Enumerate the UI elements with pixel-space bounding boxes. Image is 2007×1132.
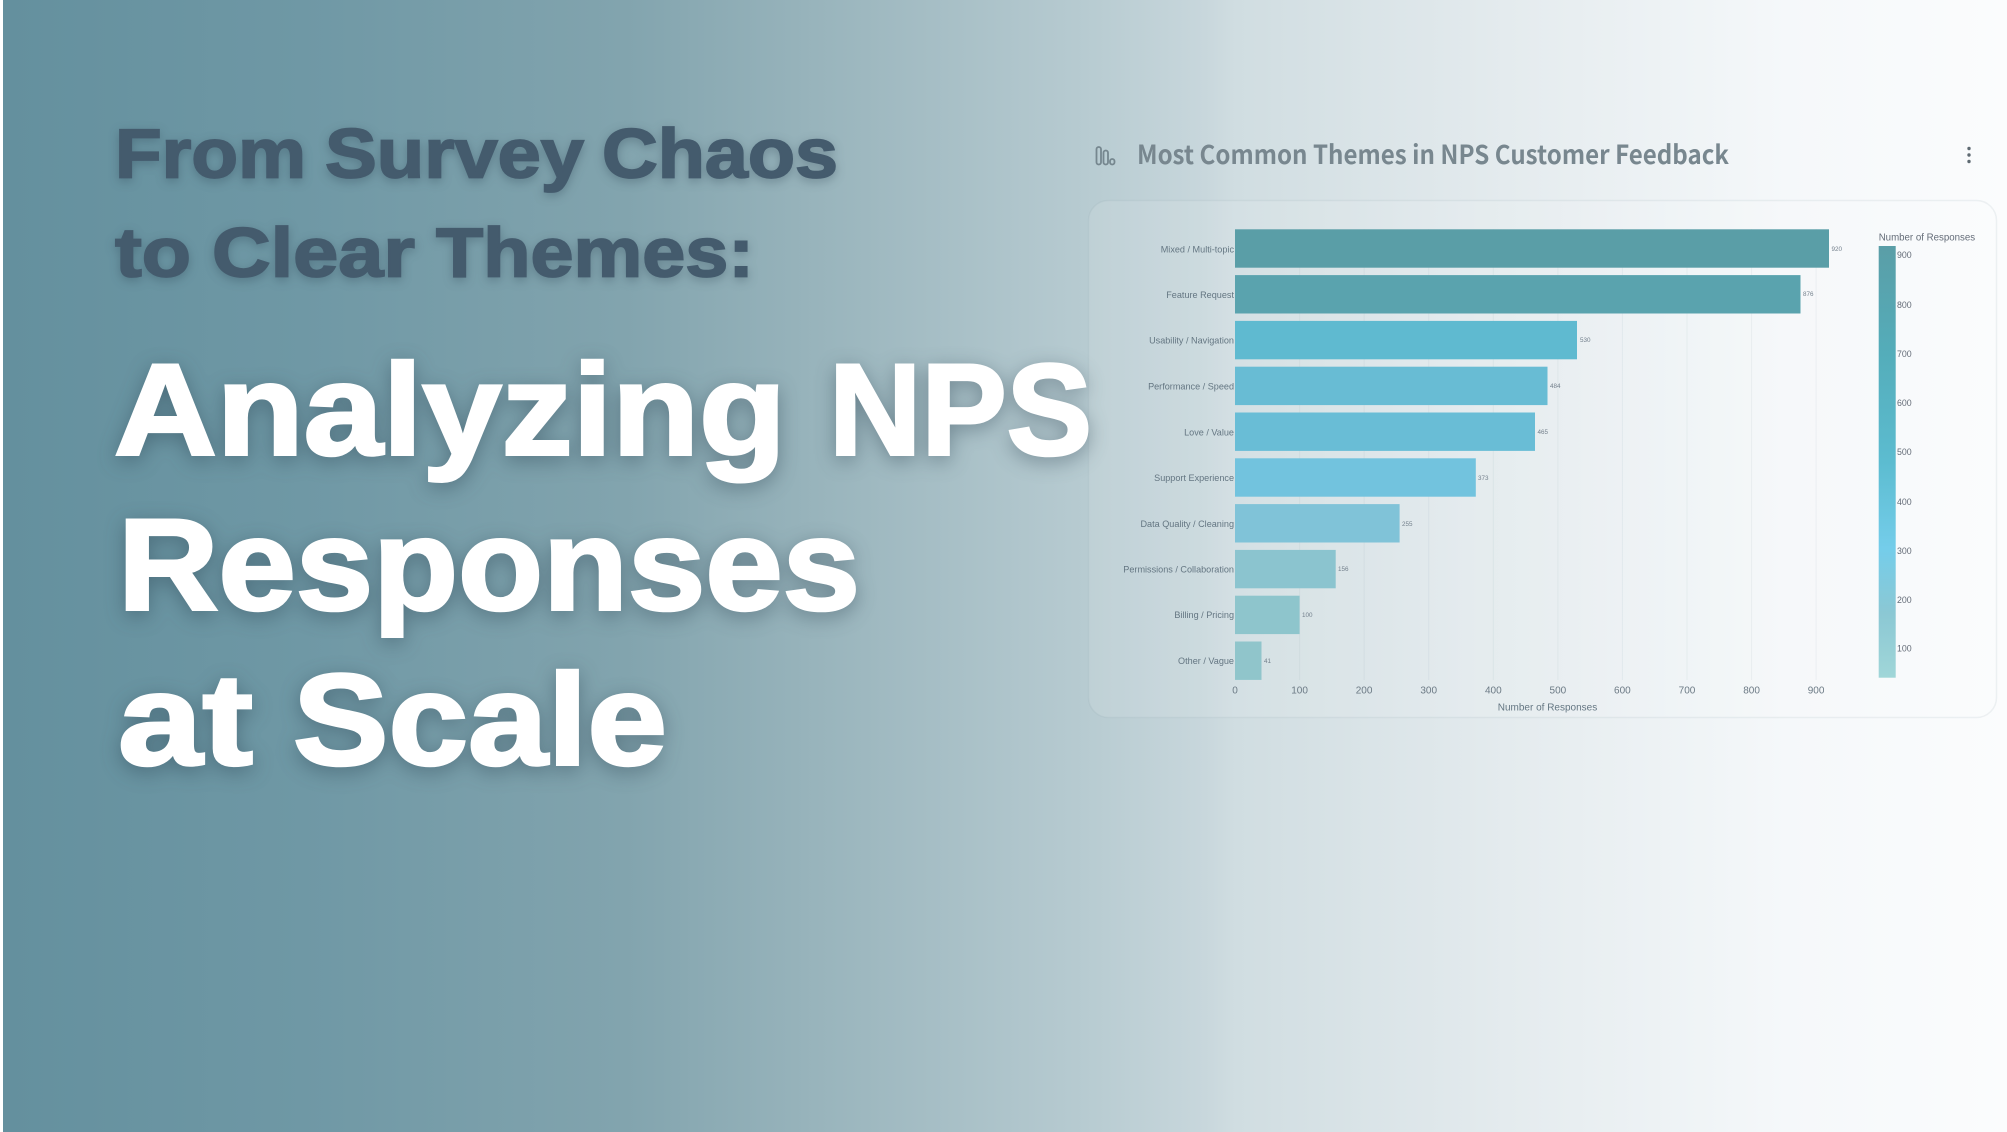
- legend ticks: [1897, 250, 1912, 654]
- x axis ticks: 100: [1291, 686, 1308, 696]
- x axis ticks: [1232, 686, 1825, 696]
- value labels: 465: [1538, 429, 1549, 436]
- legend ticks: 800: [1897, 300, 1912, 310]
- category labels: Love / Value: [1184, 428, 1234, 438]
- value labels: [1264, 246, 1843, 665]
- legend ticks: 200: [1897, 595, 1912, 605]
- category labels: Mixed / Multi-topic: [1161, 244, 1234, 254]
- value labels: 373: [1478, 475, 1489, 482]
- heading: main title: [114, 336, 1092, 792]
- icon: bar chart: [1096, 147, 1114, 164]
- icon: more menu: [1967, 147, 1971, 163]
- legend ticks: 500: [1897, 447, 1912, 457]
- heading: kicker: Chaos: [602, 114, 838, 192]
- category labels: Usability / Navigation: [1149, 336, 1234, 346]
- category labels: Performance / Speed: [1148, 382, 1234, 392]
- grid lines: [1300, 229, 1816, 680]
- heading: main title: at: [118, 646, 253, 792]
- x axis ticks: 700: [1679, 686, 1696, 696]
- bars: [1235, 229, 1829, 680]
- heading: main title: Analyzing: [114, 336, 786, 482]
- chart card: [1088, 135, 1996, 718]
- legend ticks: 100: [1897, 644, 1912, 654]
- value labels: 156: [1338, 566, 1349, 573]
- heading: main title: Scale: [293, 646, 667, 792]
- heading: kicker: Survey: [325, 114, 584, 192]
- value labels: 41: [1264, 658, 1272, 665]
- category labels: Feature Request: [1166, 290, 1234, 300]
- heading: main title: Responses: [118, 492, 860, 638]
- legend colour bar: [1879, 246, 1896, 678]
- legend title: Number of Responses: [1879, 232, 1975, 244]
- category labels: Support Experience: [1154, 473, 1234, 483]
- legend: colour scale: [1879, 232, 1975, 678]
- x axis ticks: 300: [1420, 686, 1437, 696]
- category labels: [1123, 244, 1234, 666]
- value labels: 484: [1550, 383, 1561, 390]
- x axis ticks: 600: [1614, 686, 1631, 696]
- x axis ticks: 800: [1743, 686, 1760, 696]
- bar chart: [1123, 229, 1975, 714]
- heading: kicker: From: [115, 114, 306, 192]
- heading: main title: NPS: [829, 336, 1092, 482]
- x axis ticks: 200: [1356, 686, 1373, 696]
- value labels: 530: [1580, 337, 1591, 344]
- x axis ticks: 500: [1550, 686, 1567, 696]
- legend ticks: 700: [1897, 349, 1912, 359]
- x axis title: Number of Responses: [1498, 702, 1597, 714]
- chart title row: [1096, 135, 1971, 172]
- category labels: Data Quality / Cleaning: [1140, 519, 1234, 529]
- legend ticks: 400: [1897, 497, 1912, 507]
- panel: chart area: [1088, 200, 1996, 718]
- legend ticks: 600: [1897, 398, 1912, 408]
- value labels: 876: [1803, 291, 1814, 298]
- legend ticks: 300: [1897, 546, 1912, 556]
- x axis ticks: 400: [1485, 686, 1502, 696]
- value labels: 100: [1302, 612, 1313, 619]
- chart title: Most Common Themes in NPS Customer Feedback: [1137, 135, 1729, 172]
- heading: kicker: Clear: [212, 214, 415, 292]
- value labels: 255: [1402, 521, 1413, 528]
- legend ticks: 900: [1897, 250, 1912, 260]
- category labels: Other / Vague: [1178, 656, 1234, 666]
- x axis ticks: 0: [1232, 686, 1238, 696]
- heading: kicker: to: [115, 214, 191, 292]
- heading: kicker: [115, 114, 838, 292]
- category labels: Permissions / Collaboration: [1123, 564, 1234, 574]
- heading: kicker: Themes:: [436, 214, 754, 292]
- category labels: Billing / Pricing: [1174, 610, 1234, 620]
- value labels: 920: [1832, 246, 1843, 253]
- x axis ticks: 900: [1808, 686, 1825, 696]
